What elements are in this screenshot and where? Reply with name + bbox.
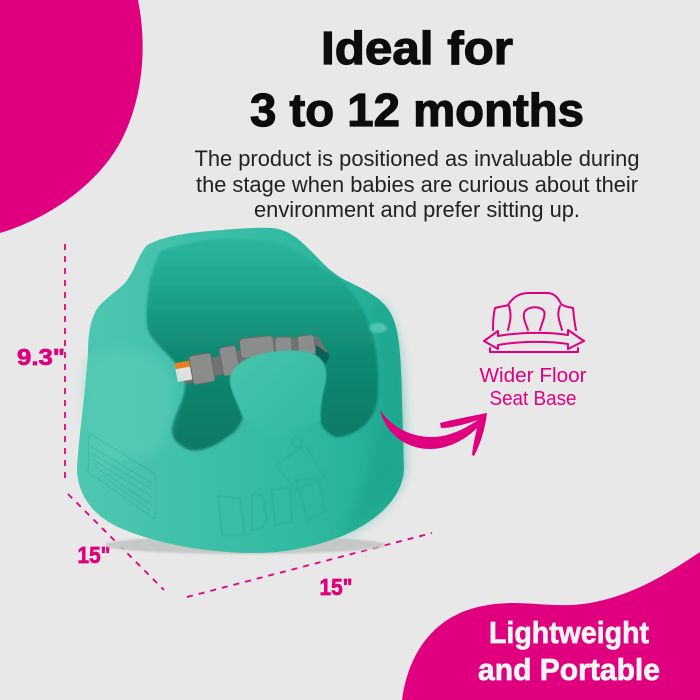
title: 3 to 12 months — [250, 84, 584, 136]
callout: lightweight and portable: Lightweight — [489, 615, 649, 650]
callout: lightweight and portable: and Portable — [478, 652, 660, 687]
dimension: width line — [187, 533, 432, 600]
arrow — [380, 410, 487, 456]
strap end — [316, 345, 330, 364]
right rim highlight — [369, 323, 387, 333]
description text: The product is positioned as invaluable during — [194, 146, 640, 171]
blob: top left — [0, 0, 143, 233]
icon: seat width — [484, 293, 584, 352]
harness warning tag — [175, 362, 192, 382]
right side shading — [340, 300, 404, 537]
front pommel — [230, 350, 326, 440]
callout: wider floor seat base: Wider Floor — [480, 365, 587, 387]
callout: wider floor seat base: Seat Base — [490, 388, 576, 410]
description text — [194, 146, 640, 222]
dimension label: depth: 15" — [78, 542, 110, 568]
harness buckles — [189, 334, 316, 385]
embossed logo — [218, 437, 325, 535]
dimension label: height: 9.3" — [17, 344, 65, 370]
cavity — [147, 239, 378, 450]
description text: environment and prefer sitting up. — [254, 197, 580, 222]
dimension: depth line — [68, 494, 164, 590]
harness warning stripe — [174, 361, 190, 369]
dimension label: width: 15" — [320, 574, 352, 600]
blob: bottom right — [402, 552, 700, 700]
callout: wider floor seat base — [480, 365, 587, 410]
title — [250, 22, 584, 136]
title: Ideal for — [321, 22, 513, 74]
callout: lightweight and portable — [478, 615, 660, 687]
floor seat product — [77, 228, 404, 554]
seat body — [77, 228, 404, 553]
left wall highlight — [88, 349, 174, 470]
seat shadow — [105, 536, 385, 554]
harness strap — [178, 337, 328, 384]
description text: the stage when babies are curious about their — [196, 172, 638, 197]
warning label — [88, 433, 155, 519]
